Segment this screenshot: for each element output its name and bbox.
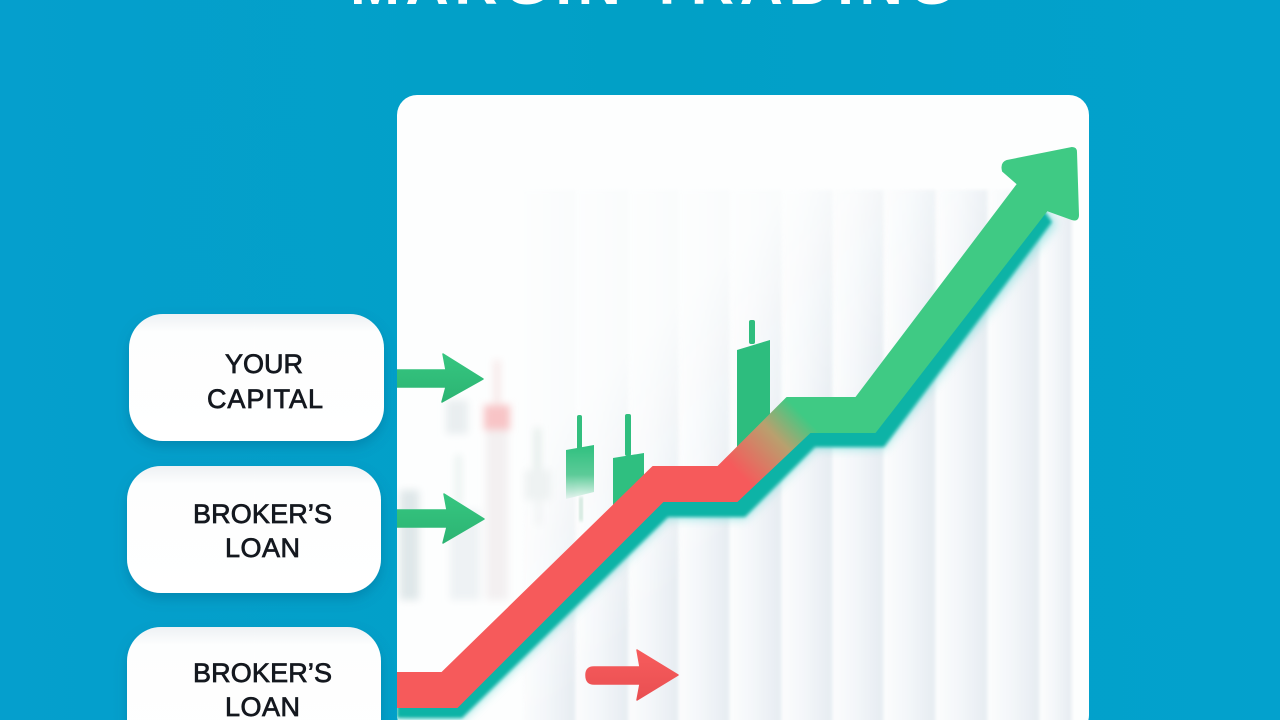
trend arrow: red to green xyxy=(397,148,1078,707)
candlestick: green tall xyxy=(737,320,770,450)
arrow: red loan xyxy=(586,650,678,700)
panel: chart card xyxy=(397,95,1089,720)
label: broker's loan 1: BROKER’S xyxy=(193,499,332,529)
label: your capital: YOUR xyxy=(225,349,303,379)
label: your capital xyxy=(129,314,384,441)
arrow: green loan xyxy=(397,494,484,543)
faded candlesticks xyxy=(400,360,551,600)
background columns xyxy=(523,190,1072,720)
label: your capital: CAPITAL xyxy=(207,384,323,414)
arrow: green capital xyxy=(397,354,483,402)
candlestick: green middle xyxy=(613,414,644,505)
label: broker's loan 1: LOAN xyxy=(225,533,300,563)
label: broker's loan 1 xyxy=(127,466,381,593)
label: broker's loan 2: BROKER’S xyxy=(193,658,332,688)
trend arrow teal shadow xyxy=(397,205,1056,720)
label: broker's loan 2 xyxy=(127,627,381,720)
candlestick: green fading xyxy=(566,415,594,521)
